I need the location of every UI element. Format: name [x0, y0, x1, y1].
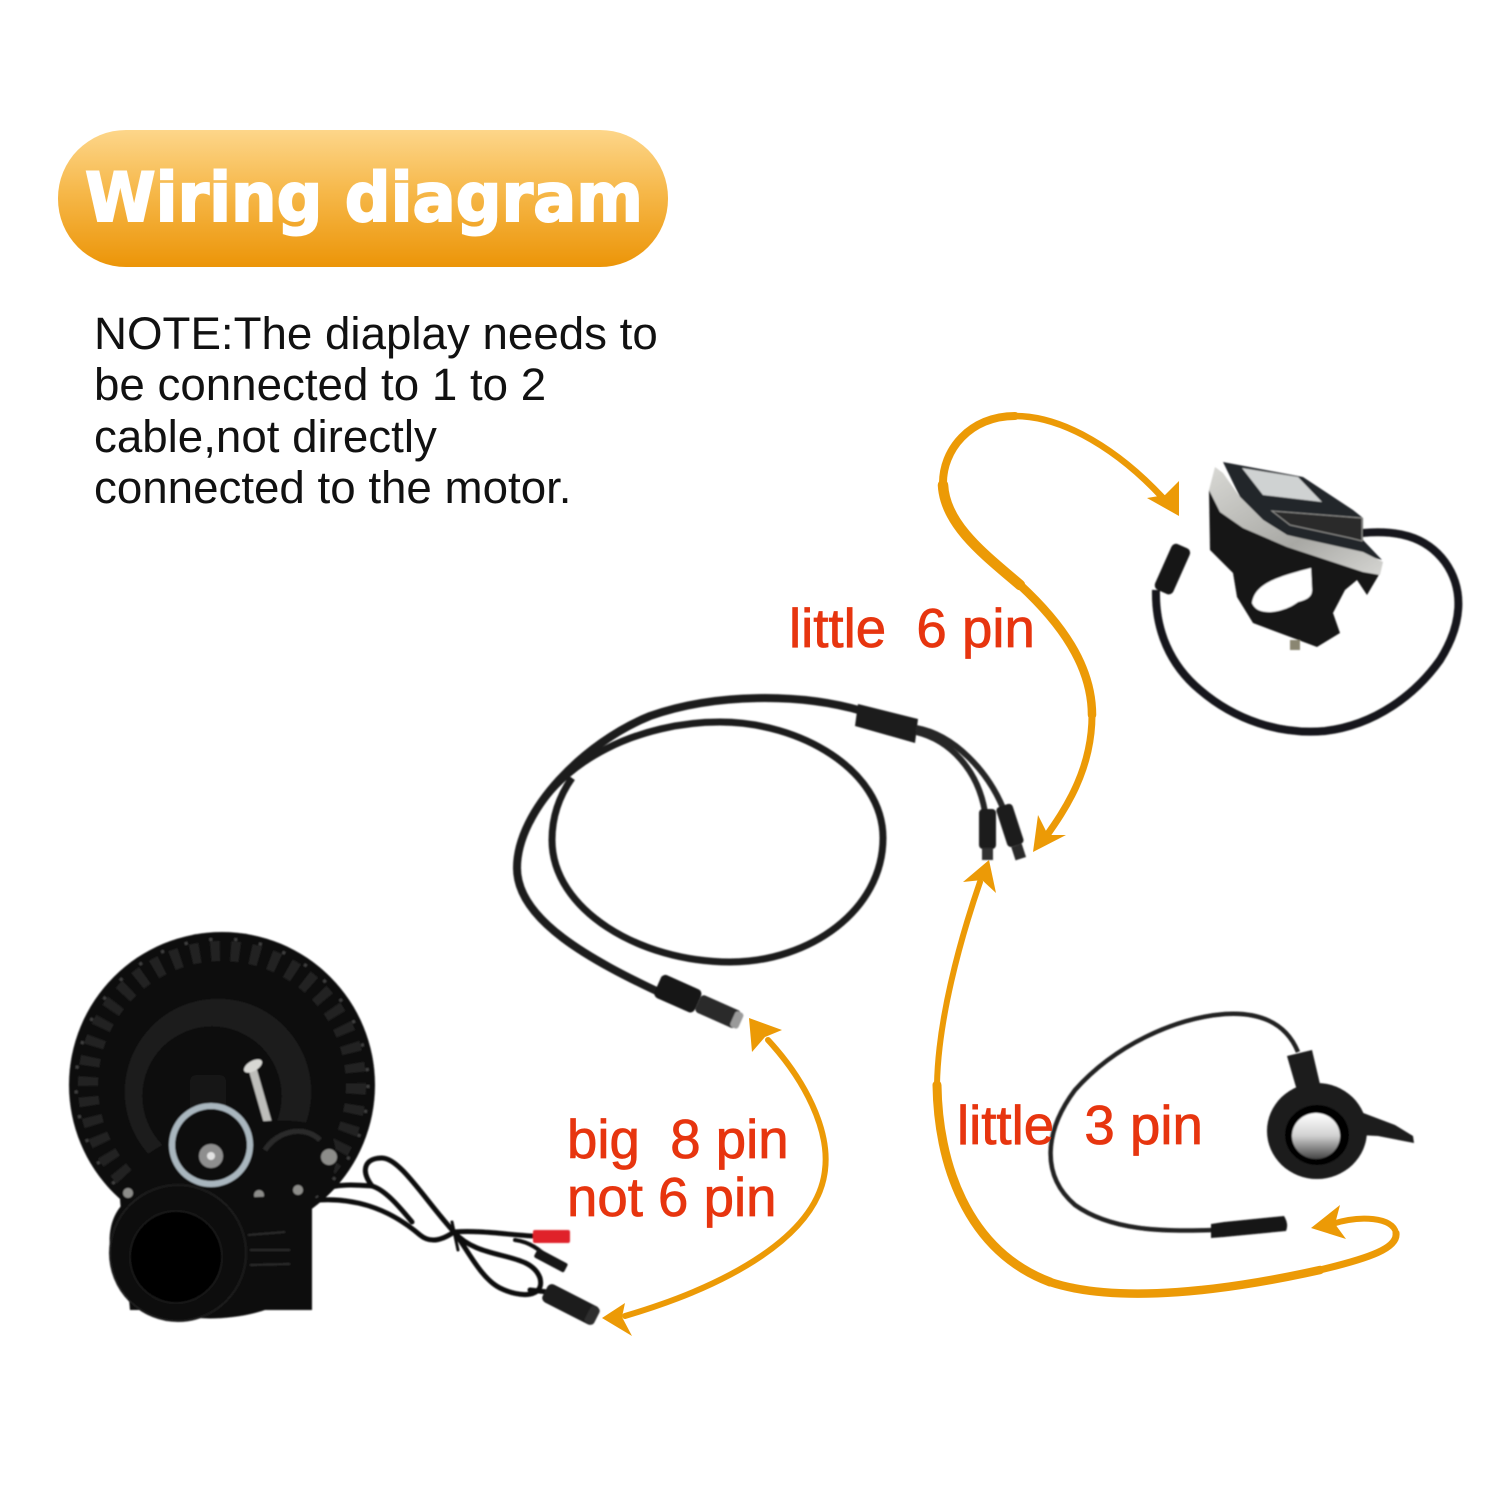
label: little 3 pin: little 3 pin	[957, 1095, 1203, 1156]
note text block: cable,not directly	[94, 411, 437, 462]
silver bezel	[1209, 467, 1383, 575]
title pill: Wiring diagram	[58, 130, 668, 267]
splitter junction	[855, 704, 918, 743]
display clamp	[1209, 490, 1380, 647]
label: little 6 pin: little 6 pin	[789, 598, 1035, 659]
motor housing rings	[110, 980, 326, 1196]
throttle lever	[1358, 1111, 1414, 1143]
note text block: connected to the motor.	[94, 462, 572, 513]
clamp hole	[1252, 568, 1312, 612]
note text block: be connected to 1 to 2	[94, 359, 546, 410]
note text block: NOTE:The diaplay needs to	[94, 308, 658, 359]
display cable connector	[1153, 542, 1192, 596]
controller cover	[110, 1194, 311, 1318]
red battery connector	[533, 1230, 570, 1243]
small hex bolts	[123, 1149, 337, 1200]
little 6 pin connector left	[979, 809, 996, 860]
display with cable	[1153, 462, 1458, 732]
big 8 pin motor connector	[541, 1282, 601, 1327]
silver bolt	[242, 1057, 272, 1123]
throttle with cable	[1051, 1014, 1414, 1238]
chainring disk	[69, 932, 375, 1238]
label: big 8 pin not 6 pin: not 6 pin	[567, 1167, 776, 1228]
clamp bolt	[1290, 640, 1300, 650]
little 6 pin connector right	[995, 803, 1029, 861]
screen	[1242, 468, 1322, 502]
display face	[1223, 462, 1382, 560]
arrow: motor to 1 to 2 cable	[602, 1018, 826, 1336]
arrow: 1 to 2 cable to throttle	[937, 860, 1396, 1294]
throttle ring	[1267, 1083, 1367, 1179]
lower motor bracket	[120, 1120, 336, 1310]
throttle tab	[1287, 1050, 1320, 1094]
motor cables	[318, 1158, 548, 1295]
crank shaft	[190, 1075, 226, 1130]
black connector	[534, 1248, 568, 1273]
controller cap	[110, 1185, 246, 1321]
label: big 8 pin not 6 pin	[567, 1109, 789, 1228]
keypad	[1272, 511, 1362, 541]
throttle connector	[1211, 1216, 1287, 1238]
big 8 pin connector	[653, 973, 746, 1033]
note text block	[94, 308, 658, 513]
title pill: Wiring diagram: Wiring diagram	[85, 159, 643, 238]
label: big 8 pin not 6 pin: big 8 pin	[567, 1109, 789, 1170]
glass bearing ring	[169, 1103, 253, 1187]
arrow: 1 to 2 cable to display	[943, 416, 1179, 852]
motor	[69, 932, 601, 1327]
Y cable (1 to 2 cable)	[517, 698, 1029, 1033]
